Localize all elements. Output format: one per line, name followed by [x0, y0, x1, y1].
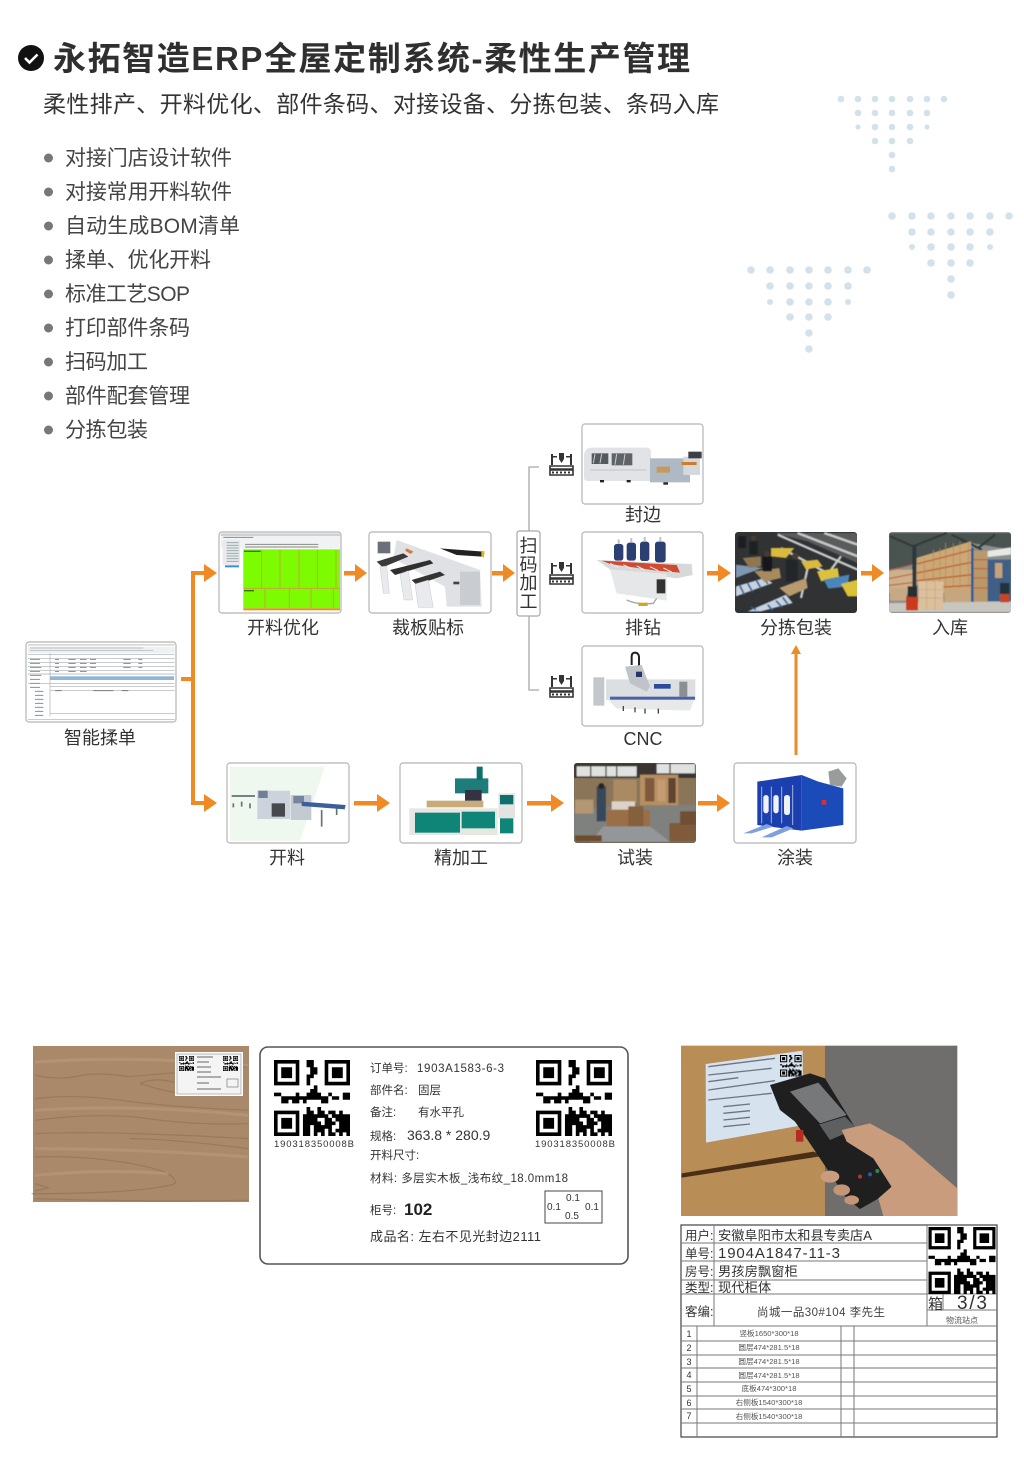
label: 排钻: 排钻: [625, 618, 661, 638]
edge banding box: 0.1: [547, 1202, 561, 1213]
box: 扫码加工: [517, 531, 540, 616]
box count: 物流站点: [946, 1315, 978, 1325]
label fields: 备注:: [370, 1105, 396, 1119]
qr code left: [274, 1060, 350, 1136]
card: 智能揉单: [26, 642, 176, 722]
label: 精加工: 精加工: [434, 848, 488, 868]
arrow: main split connector: [181, 564, 217, 812]
qr code: [928, 1227, 996, 1294]
header fields: 客编:: [685, 1304, 713, 1319]
label fields: 订单号:: [370, 1062, 408, 1075]
arrow: [707, 564, 731, 582]
arrow: [344, 564, 367, 582]
label fields: 102: [404, 1200, 432, 1219]
label fields: 固层: [418, 1084, 441, 1097]
edge banding box: 0.5: [565, 1211, 579, 1222]
parts rows: 2: [686, 1343, 692, 1353]
parts rows: 圆层474*281.5*18: [738, 1343, 800, 1352]
box count: 箱: [928, 1296, 943, 1313]
qr caption right: 190318350008B: [535, 1139, 615, 1150]
parts rows: 7: [686, 1411, 692, 1421]
qr code right: [536, 1060, 612, 1136]
card: 排钻: [582, 532, 703, 613]
qr caption left: 190318350008B: [274, 1139, 354, 1150]
table grid: [681, 1225, 997, 1437]
title icon: check badge: [18, 45, 44, 71]
edge banding box: 0.1: [585, 1202, 599, 1213]
feature list: 对接常用开料软件: [65, 181, 232, 204]
parts rows: 右侧板1540*300*18: [736, 1397, 802, 1407]
label: 封边: 封边: [625, 505, 661, 525]
panel: packing slip table: [681, 1225, 997, 1437]
edge banding box: 0.1: [566, 1193, 580, 1204]
decoration: dot triangles: [747, 96, 1013, 353]
header fields: 用户:: [685, 1228, 713, 1243]
feature list: [44, 147, 240, 442]
label fields: 363.8 * 280.9: [407, 1127, 491, 1143]
card: 精加工: [400, 763, 522, 843]
label: 分拣包装: 分拣包装: [760, 618, 832, 638]
parts rows: 4: [686, 1370, 692, 1380]
label: 开料: 开料: [269, 848, 305, 868]
header fields: [685, 1227, 885, 1319]
arrow: [698, 794, 730, 812]
photo: scanner on carton: [681, 1046, 957, 1216]
parts rows: 底板474*300*18: [742, 1383, 796, 1393]
box: 扫码加工: 工: [520, 592, 538, 612]
parts rows: 圆层474*281.5*18: [738, 1371, 800, 1380]
label: 试装: 试装: [617, 848, 653, 868]
label fields: [370, 1062, 568, 1244]
photo: 分拣包装: [735, 532, 861, 613]
header fields: 单号:: [685, 1247, 713, 1261]
photo: 试装: [574, 763, 696, 843]
box count: 3/3: [957, 1293, 987, 1314]
label: 入库: 入库: [932, 618, 968, 638]
parts rows: 3: [686, 1357, 692, 1367]
label: CNC: CNC: [624, 729, 662, 749]
card: 封边: [582, 424, 703, 504]
header fields: 类型:: [685, 1281, 713, 1295]
box: 扫码加工: 扫: [520, 536, 538, 556]
label fields: 成品名: 左右不见光封边2111: [370, 1229, 541, 1244]
panel: part label: [260, 1047, 628, 1264]
feature list: 分拣包装: [65, 419, 148, 442]
header fields: 安徽阜阳市太和县专卖店A: [718, 1227, 872, 1243]
box count: [928, 1293, 987, 1325]
header fields: 尚城一品30#104 李先生: [757, 1305, 885, 1319]
card: 开料: [227, 763, 349, 843]
card: 涂装: [734, 763, 856, 843]
card: 裁板贴标: [369, 532, 491, 613]
photo: wood panel with label: [32, 1046, 249, 1202]
label fields: 1903A1583-6-3: [417, 1063, 504, 1075]
label fields: 部件名:: [370, 1083, 408, 1097]
subtitle: 柔性排产、开料优化、部件条码、对接设备、分拣包装、条码入库: [43, 91, 719, 117]
card: 开料优化: [219, 532, 341, 613]
parts rows: 6: [686, 1398, 692, 1408]
header fields: 男孩房飘窗柜: [718, 1263, 798, 1279]
parts rows: 右侧板1540*300*18: [736, 1411, 802, 1421]
title: 永拓智造ERP全屋定制系统-柔性生产管理: [53, 40, 690, 77]
feature list: 标准工艺SOP: [65, 283, 190, 306]
label fields: 规格:: [370, 1129, 396, 1143]
header fields: 现代柜体: [718, 1280, 771, 1295]
photo: 入库: [889, 532, 1012, 613]
label: 智能揉单: 智能揉单: [64, 728, 136, 748]
arrow: [861, 564, 884, 582]
label: 裁板贴标: 裁板贴标: [392, 618, 464, 638]
icon: cnc machine 3: [550, 675, 573, 697]
box: 扫码加工: 码: [520, 555, 538, 575]
parts rows: 5: [686, 1384, 692, 1394]
arrow: 涂装 to 分拣包装: [791, 645, 801, 755]
header fields: 1904A1847-11-3: [718, 1245, 840, 1262]
feature list: 揉单、优化开料: [65, 249, 211, 272]
feature list: 扫码加工: [65, 351, 148, 374]
label fields: 材料: 多层实木板_浅布纹_18.0mm18: [370, 1171, 568, 1185]
parts rows: [686, 1328, 802, 1421]
icon: cnc machine 2: [550, 562, 573, 584]
icon: cnc machine 1: [550, 453, 573, 475]
header fields: 房号:: [685, 1264, 713, 1279]
feature list: 自动生成BOM清单: [65, 215, 240, 238]
label fields: 柜号:: [370, 1204, 396, 1217]
label fields: 开料尺寸:: [370, 1148, 419, 1162]
connector: scan branches: [529, 467, 539, 690]
parts rows: 竖板1650*300*18: [739, 1328, 799, 1338]
edge banding box: [545, 1191, 602, 1223]
arrow: [354, 794, 390, 812]
label: 涂装: 涂装: [777, 848, 813, 868]
card: CNC: [582, 646, 703, 726]
feature list: 对接门店设计软件: [65, 147, 232, 170]
arrow: [527, 794, 564, 812]
feature list: 打印部件条码: [65, 317, 190, 340]
arrow: [492, 564, 515, 582]
parts rows: 1: [686, 1329, 692, 1339]
label: 开料优化: 开料优化: [247, 618, 319, 638]
feature list: 部件配套管理: [65, 385, 190, 408]
label fields: 有水平孔: [418, 1105, 464, 1119]
box: 扫码加工: 加: [520, 573, 538, 593]
parts rows: 圆层474*281.5*18: [738, 1357, 800, 1366]
